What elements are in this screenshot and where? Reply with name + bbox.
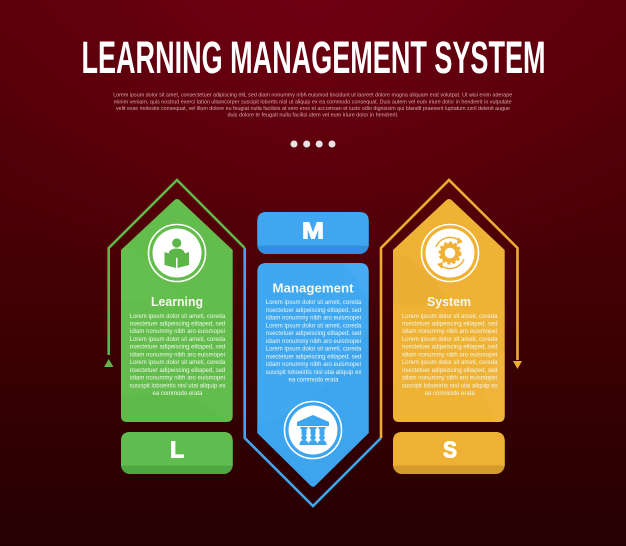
body text: management: Lorem ipsum dolor sit ameti, coreda (266, 346, 362, 353)
body text: management (266, 299, 362, 384)
body text: learning: ea commodo erata (152, 390, 203, 397)
body text: system: idiam nonummy nibh aro euismopei (402, 375, 497, 382)
body text: system: idiam nonummy nibh aro euismopei (402, 352, 497, 358)
body text: management: Lorem ipsum dolor sit ameti, coreda (266, 322, 362, 329)
button: S (393, 432, 505, 474)
body text: system: suscipit loboeirtis nisl utai aliquip ex (402, 382, 498, 390)
intro paragraph: velit esse molestie consequat, vel illum dolore eu feugiat nulla facilisis at vero eros et accumsan et iusto odio dignissim qui blandit praesent luptatum zzril delenit augue (116, 106, 510, 112)
body text: management: nsectetuer adipeiscing elitaped, sed (266, 307, 362, 314)
arrow outline: orange (381, 180, 522, 438)
body text: management: Lorem ipsum dolor sit ameti, coreda (266, 299, 362, 306)
body text: system: Lorem ipsum dolor sit ameti, coreda (402, 313, 498, 320)
body text: management: idiam nonummy nibh aro euismopei (266, 338, 361, 345)
intro paragraph (113, 93, 512, 119)
body text: system: ea commodo erata (425, 390, 475, 397)
body text: learning: Lorem ipsum dolor sit ameti, coreda (130, 336, 226, 343)
button: L (121, 432, 233, 474)
body text: learning: nsectetuer adipeiscing elitaped, sed (130, 344, 226, 351)
icon: institution building (284, 402, 342, 458)
body text: learning: nsectetuer adipeiscing elitaped, sed (130, 367, 226, 374)
body text: management: idiam nonummy nibh aro euismopei (266, 361, 361, 368)
body text: system: nsectetuer adipeiscing elitaped, sed (402, 320, 498, 328)
icon: gear cycle (422, 224, 478, 282)
button: S: S (443, 436, 457, 462)
body text: management: nsectetuer adipeiscing elitaped, sed (266, 330, 362, 337)
body text: learning: idiam nonummy nibh aro euismopei (130, 328, 225, 335)
arrow outline: blue (245, 248, 381, 506)
body text: system: nsectetuer adipeiscing elitaped, sed (402, 367, 498, 374)
body text: management: suscipit loboeirtis nisl utai aliquip ex (266, 369, 362, 376)
body text: learning: Lorem ipsum dolor sit ameti, coreda (130, 313, 226, 320)
body text: system: Lorem ipsum dolor sit ameti, coreda (402, 359, 498, 366)
body text: system: nsectetuer adipeiscing elitaped, sed (402, 344, 498, 351)
body text: learning: suscipit loboeirtis nisl utai aliquip ex (130, 382, 226, 390)
body text: management: nsectetuer adipeiscing elitaped, sed (266, 353, 362, 360)
body text: learning (130, 313, 226, 397)
intro paragraph: duis dolore te feugait nulla facilisi utem vel eum iriure dolor in hendrerit. (228, 113, 399, 119)
body text: learning: idiam nonummy nibh aro euismopei (130, 352, 225, 358)
body text: learning: Lorem ipsum dolor sit ameti, coreda (130, 359, 226, 366)
body text: management: ea commodo erata (288, 377, 339, 384)
intro paragraph: Lorem ipsum dolor sit amet, consectetuer adipiscing elit, sed diam nonummy nibh euismod tincidunt ut laoreet dolore magna aliquam erat volutpat. Ut wisi enim aderape (113, 93, 512, 99)
button: L: L (170, 436, 184, 462)
body text: system: idiam nonummy nibh aro euismopei (402, 328, 497, 335)
panel: system (393, 199, 505, 422)
pagination dots (290, 140, 336, 148)
panel: management (257, 263, 369, 487)
body text: management: idiam nonummy nibh aro euismopei (266, 315, 361, 322)
icon: reading student (148, 224, 206, 282)
body text: learning: nsectetuer adipeiscing elitaped, sed (130, 320, 226, 328)
button: M: M (302, 218, 324, 244)
body text: learning: idiam nonummy nibh aro euismopei (130, 375, 225, 382)
heading: system: System (427, 295, 471, 309)
body text: system (402, 313, 498, 397)
heading: learning: Learning (151, 295, 203, 309)
heading: management: Management (272, 282, 354, 296)
button: M (257, 212, 369, 254)
panel: learning (121, 199, 233, 422)
intro paragraph: minim veniam, quis nostrud exerci tation ullamcorper suscipit lobortis nisl ut aliquip ex ea commodo consequat. Duis autem vel eum iriure dolor in hendrerit in vulputate (114, 99, 512, 105)
arrow outline: green (104, 180, 245, 367)
body text: system: Lorem ipsum dolor sit ameti, coreda (402, 336, 498, 343)
